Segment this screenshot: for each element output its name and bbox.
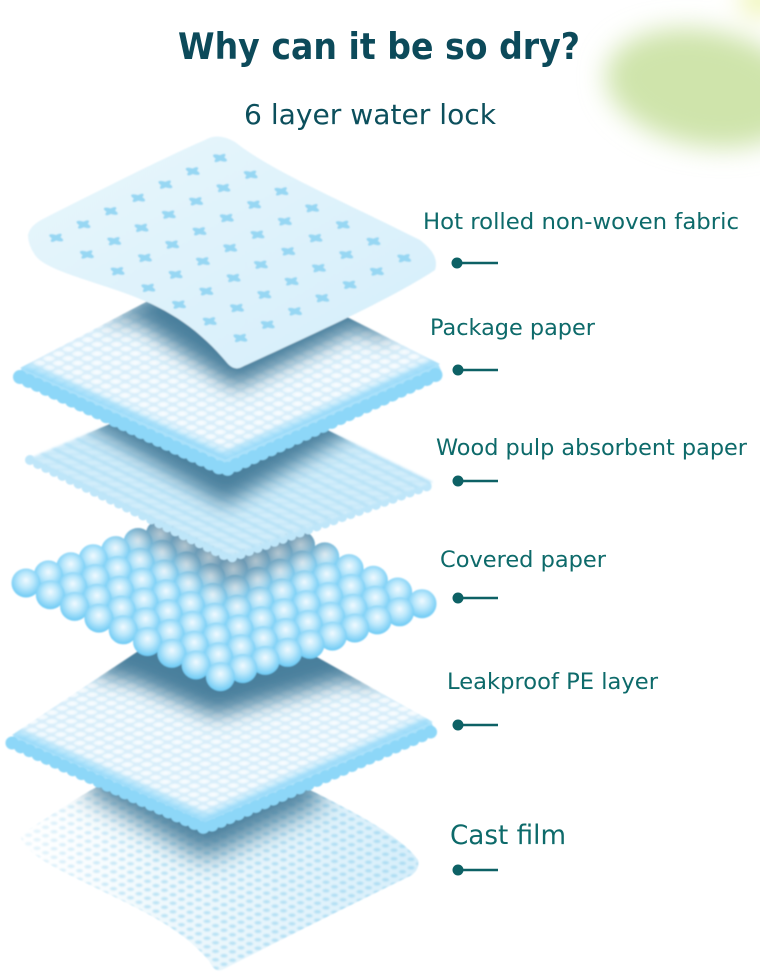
- title: Why can it be so dry?: [178, 25, 580, 68]
- subtitle: 6 layer water lock: [244, 98, 497, 131]
- label: hot rolled non-woven fabric: [423, 210, 739, 268]
- layer 3: wood pulp absorbent paper: [24, 423, 433, 563]
- layer 4: covered paper spheres: [12, 496, 436, 691]
- label: wood pulp absorbent paper: [436, 436, 748, 486]
- label: package paper: Package paper: [430, 316, 596, 341]
- label: covered paper: [440, 548, 607, 604]
- label: leakproof PE layer: Leakproof PE layer: [447, 670, 659, 695]
- label: cast film: Cast film: [450, 820, 566, 851]
- layer 2: package paper: [12, 301, 444, 477]
- label: leakproof PE layer: [447, 670, 659, 730]
- label: package paper: [430, 316, 596, 376]
- decorative green leaf blur: [596, 0, 760, 162]
- label: cast film: [450, 820, 566, 876]
- label: covered paper: Covered paper: [440, 548, 607, 573]
- layer 6: cast film: [21, 786, 420, 971]
- layer 5: leakproof PE layer: [4, 651, 438, 834]
- label: wood pulp absorbent paper: Wood pulp absorbent paper: [436, 436, 748, 461]
- layer 1: hot rolled non-woven fabric: [28, 136, 436, 368]
- exploded layer stack illustration: [0, 136, 440, 976]
- label: hot rolled non-woven fabric: Hot rolled non-woven fabric: [423, 210, 739, 235]
